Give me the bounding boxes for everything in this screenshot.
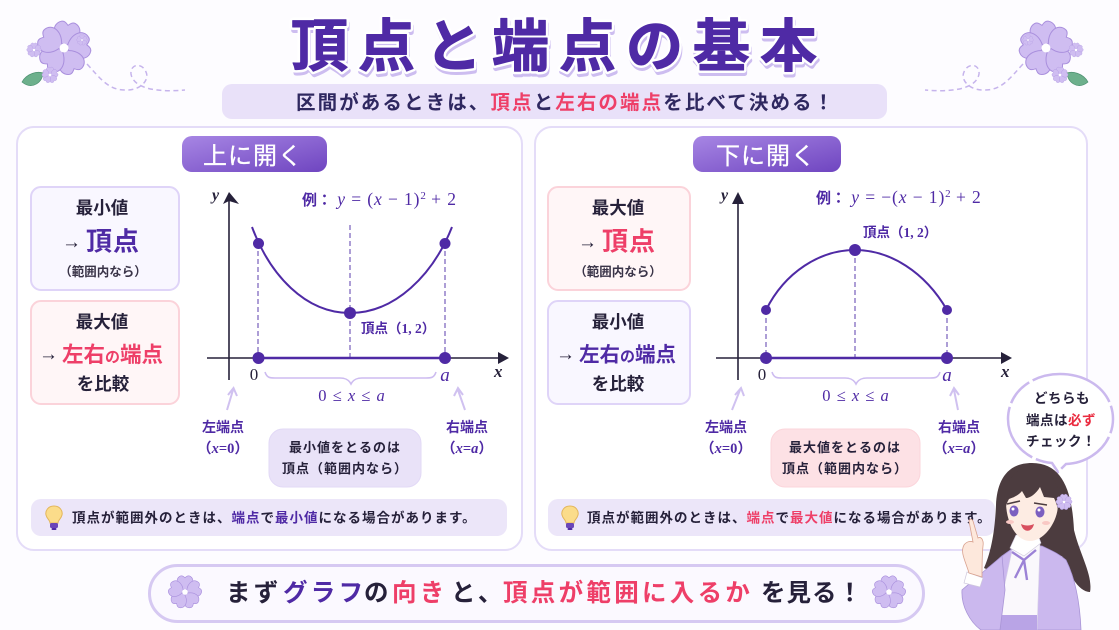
bottom banner: 向き xyxy=(392,579,448,607)
box: minimum: （範囲内なら） xyxy=(59,264,147,279)
bottom banner: グラフ xyxy=(283,578,366,607)
box: minimum: → xyxy=(556,344,575,365)
label: right endpoint: 右端点 xyxy=(446,419,488,435)
heading pill: upward: 上に開く xyxy=(203,143,303,170)
box: maximum: （範囲内なら） xyxy=(574,264,662,279)
label: left endpoint: 左端点 xyxy=(705,419,747,435)
character illustration xyxy=(962,463,1090,630)
label: right endpoint: 右端点 xyxy=(938,419,980,435)
callout: minimum at vertex: 頂点（範囲内なら） xyxy=(282,461,408,476)
panel: opens downward xyxy=(535,127,1087,550)
bottom banner: 頂点が範囲に入るか xyxy=(503,578,753,607)
bottom banner xyxy=(150,566,924,622)
box: minimum: 頂点 xyxy=(86,226,140,256)
title: 頂点と端点の基本 xyxy=(291,15,827,79)
graph: downward parabola xyxy=(716,187,1012,405)
heading pill: upward xyxy=(182,136,327,172)
box: maximum: を比較 xyxy=(77,374,130,394)
box: minimum xyxy=(31,187,179,290)
icon: light bulb xyxy=(46,506,62,530)
graph: downward parabola: x xyxy=(1000,362,1010,381)
speech bubble: どちらも xyxy=(1034,391,1090,406)
box: maximum: → xyxy=(578,232,597,253)
box: minimum: → xyxy=(62,232,81,253)
graph: upward parabola: 2 xyxy=(420,190,426,202)
graph: upward parabola: x xyxy=(493,362,503,381)
arrow: right endpoint xyxy=(454,388,465,410)
label: left endpoint xyxy=(197,419,249,457)
graph: downward parabola: a xyxy=(942,365,952,386)
label: left endpoint: 左端点 xyxy=(202,419,244,435)
label: right endpoint xyxy=(441,419,493,457)
bottom banner: と、 xyxy=(451,580,506,607)
graph: upward parabola: y xyxy=(210,187,220,204)
graph: upward parabola: + 2 xyxy=(426,189,457,209)
graph: upward parabola: 0 xyxy=(250,365,258,384)
label: right endpoint: （x=a） xyxy=(933,440,985,457)
speech bubble xyxy=(1008,374,1113,472)
graph: downward parabola: y xyxy=(719,187,729,204)
graph: upward parabola: a xyxy=(440,365,450,386)
tip bar: 頂点が範囲外のときは、端点で最大値になる場合があります。 xyxy=(587,510,992,526)
arrow: left endpoint xyxy=(227,388,237,410)
graph: downward parabola: 2 xyxy=(945,188,951,200)
graph: upward parabola: 頂点（1, 2） xyxy=(361,321,435,336)
bottom banner: の xyxy=(364,580,392,607)
callout: maximum at vertex: 最大値をとるのは xyxy=(789,440,901,455)
arrow: left endpoint xyxy=(732,388,744,410)
box: minimum xyxy=(548,301,690,404)
box: maximum: 頂点 xyxy=(602,226,656,256)
icon: right flower xyxy=(871,576,907,610)
heading pill: downward: 下に開く xyxy=(716,143,816,170)
box: maximum: → xyxy=(39,344,58,365)
graph: downward parabola: 例： y = −(x − 1) xyxy=(816,187,945,207)
label: left endpoint: （x=0） xyxy=(700,440,752,457)
decoration: right flower and ribbon xyxy=(925,17,1088,91)
icon: left flower xyxy=(167,576,203,610)
callout: maximum at vertex xyxy=(771,429,920,487)
subtitle band: 区間があるときは、頂点と左右の端点を比べて決める！ xyxy=(296,91,835,114)
tip bar xyxy=(548,499,995,536)
graph: downward parabola: 0 ≤ x ≤ a xyxy=(822,386,890,405)
box: maximum: 左右の端点 xyxy=(62,343,163,367)
box: minimum: 最小値 xyxy=(76,198,128,218)
box: minimum: を比較 xyxy=(592,374,645,394)
arrow: right endpoint xyxy=(950,388,959,410)
box: maximum xyxy=(31,301,179,404)
panel: opens upward xyxy=(17,127,522,550)
decoration: left flower and ribbon xyxy=(22,17,185,91)
callout: minimum at vertex xyxy=(269,429,421,487)
tip bar xyxy=(31,499,507,536)
label: right endpoint xyxy=(933,419,985,457)
box: maximum xyxy=(548,187,690,290)
label: left endpoint xyxy=(700,419,752,457)
title: 頂点と端点の基本 xyxy=(291,15,827,79)
callout: minimum at vertex: 最小値をとるのは xyxy=(289,440,401,455)
graph: downward parabola: 頂点（1, 2） xyxy=(863,225,937,240)
box: maximum: 最大値 xyxy=(76,312,128,332)
box: minimum: 最小値 xyxy=(592,312,644,332)
label: left endpoint: （x=0） xyxy=(197,440,249,457)
bottom banner: を見る！ xyxy=(761,580,863,607)
box: maximum: 最大値 xyxy=(592,198,644,218)
bottom banner: まず xyxy=(226,579,282,607)
tip bar: 頂点が範囲外のときは、端点で最小値になる場合があります。 xyxy=(72,510,477,526)
label: right endpoint: （x=a） xyxy=(441,440,493,457)
speech bubble: 端点は必ず xyxy=(1026,412,1096,428)
graph: downward parabola: + 2 xyxy=(951,187,982,207)
callout: maximum at vertex: 頂点（範囲内なら） xyxy=(782,461,908,476)
subtitle band xyxy=(222,84,887,119)
speech bubble: チェック！ xyxy=(1026,434,1096,449)
graph: upward parabola: 例： y = (x − 1) xyxy=(302,189,420,209)
graph: upward parabola xyxy=(207,187,509,405)
title: 頂点と端点の基本 xyxy=(292,18,828,82)
icon: light bulb xyxy=(562,506,578,530)
graph: upward parabola: 0 ≤ x ≤ a xyxy=(318,386,386,405)
graph: downward parabola: 0 xyxy=(758,365,766,384)
heading pill: downward xyxy=(693,136,841,172)
box: minimum: 左右の端点 xyxy=(579,344,676,366)
